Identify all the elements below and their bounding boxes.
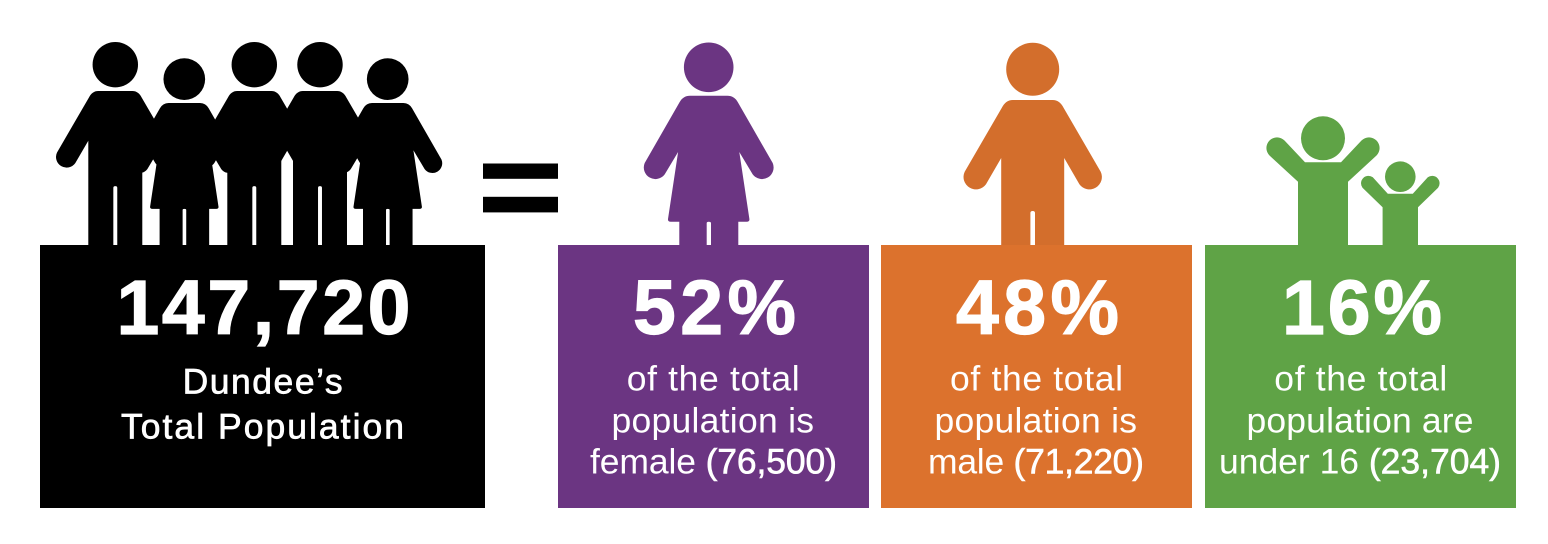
icon: equals sign	[483, 164, 558, 212]
icon: child	[1361, 161, 1440, 250]
panel: under 16	[1205, 245, 1516, 508]
icon: man 2	[195, 42, 314, 254]
icon: man 3	[261, 42, 379, 254]
text: female description: population is	[612, 400, 814, 440]
icon: adult	[1266, 116, 1380, 250]
icon: man	[964, 43, 1102, 250]
panel: female	[558, 245, 869, 508]
icon: group of five people	[56, 42, 442, 266]
panel: total population	[40, 245, 485, 508]
icon: man 1	[56, 42, 175, 254]
icon: adult and child with raised arms	[1266, 116, 1440, 250]
text: under 16 description: under 16 (23,704)	[1219, 441, 1501, 481]
text: male description	[928, 358, 1144, 481]
text: under 16 description: population are	[1246, 400, 1474, 440]
label: Dundee's Total Population: Dundee’s	[183, 361, 343, 401]
text: female description	[590, 358, 837, 481]
text: male description: male (71,220)	[928, 441, 1144, 481]
text: male description: population is	[934, 400, 1137, 440]
icon: woman 2	[333, 58, 442, 266]
figure: 48%: 48%	[956, 265, 1119, 351]
label: Dundee's Total Population	[121, 361, 404, 446]
figure: 16%: 16%	[1282, 265, 1442, 351]
panel: male	[881, 245, 1192, 508]
text: under 16 description	[1219, 358, 1501, 481]
icon: woman	[644, 43, 774, 250]
text: female description: female (76,500)	[590, 441, 837, 481]
text: male description: of the total	[950, 358, 1123, 398]
figure: 52%: 52%	[633, 265, 796, 351]
figure: 147,720: 147,720	[116, 265, 410, 351]
text: under 16 description: of the total	[1274, 358, 1447, 398]
icon: woman 1	[130, 58, 239, 266]
label: Dundee's Total Population: Total Population	[121, 406, 404, 446]
text: female description: of the total	[627, 358, 800, 398]
